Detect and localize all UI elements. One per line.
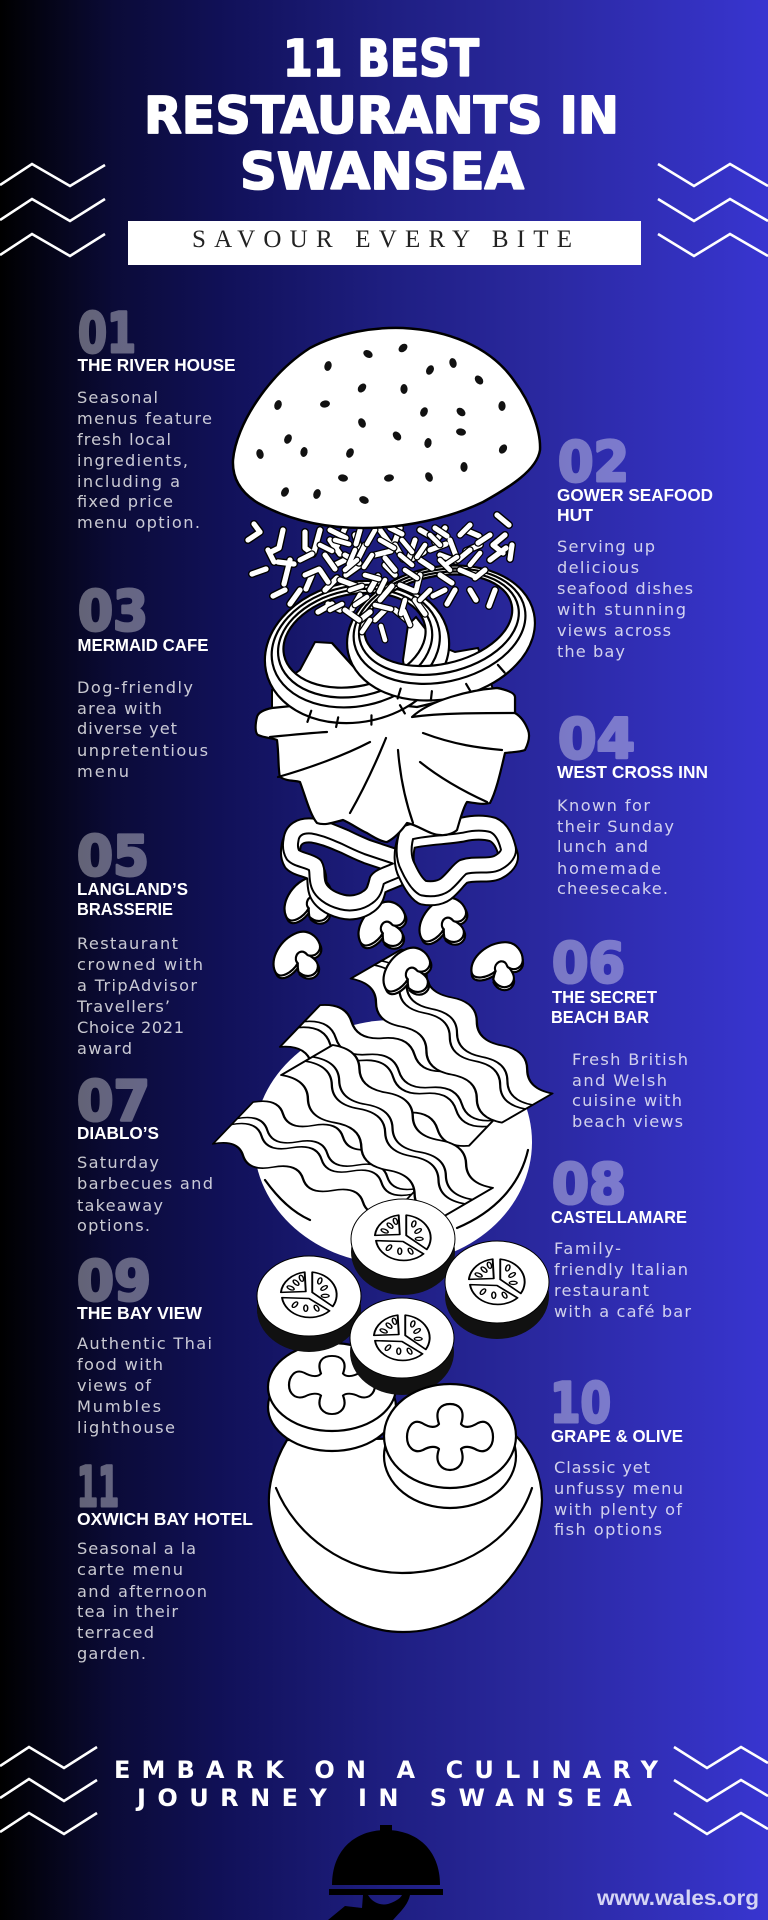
panel: 04 west cross inn: Known for	[557, 796, 650, 815]
panel: 02 gower seafood hut: GOWER SEAFOOD	[557, 485, 713, 505]
panel: 02 gower seafood hut: seafood dishes	[557, 579, 693, 598]
panel: 05 langland's brasserie: BRASSERIE	[77, 899, 173, 919]
panel: 10 grape and olive: fish options	[554, 1520, 662, 1539]
panel: 04 west cross inn: WEST CROSS INN	[557, 762, 708, 782]
panel: 02 gower seafood hut: HUT	[557, 505, 593, 525]
panel: 10 grape and olive: unfussy menu	[554, 1479, 683, 1498]
title: SWANSEA	[240, 143, 525, 202]
panel: 08 castellamare: restaurant	[554, 1281, 649, 1300]
panel: 07 diablo's: 07	[77, 1069, 150, 1133]
cucumber 1	[257, 1256, 361, 1352]
cucumber 2	[351, 1199, 455, 1295]
panel: 07 diablo's: Saturday	[77, 1153, 159, 1172]
panel: 04 west cross inn: homemade	[557, 859, 661, 878]
panel: 08 castellamare: Family-	[554, 1239, 621, 1258]
subtitle banner: SAVOUR EVERY BITE	[192, 226, 572, 253]
panel: 05 langland's brasserie: LANGLAND’S	[77, 879, 188, 899]
icon: waiter hand with cloche	[328, 1825, 443, 1920]
bacon strips	[208, 946, 559, 1222]
panel: 06 the secret beach bar	[551, 931, 688, 1131]
panel: 02 gower seafood hut: 02	[558, 430, 629, 494]
closing message: JOURNEY IN SWANSEA	[135, 1784, 632, 1812]
cucumber slices: back row	[257, 1199, 549, 1352]
panel: 03 mermaid cafe: 03	[78, 579, 148, 643]
panel: 10 grape and olive: with plenty of	[554, 1500, 682, 1519]
panel: 02 gower seafood hut: Serving up	[557, 537, 655, 556]
decorative chevrons: bottom left	[0, 1747, 97, 1834]
panel: 04 west cross inn	[557, 707, 708, 898]
panel: 01 the river house: fixed price	[77, 492, 173, 511]
panel: 09 the bay view	[77, 1249, 212, 1437]
tomato slice: right	[384, 1384, 516, 1508]
title: 11 BEST	[283, 30, 479, 89]
panel: 10 grape and olive: GRAPE & OLIVE	[551, 1426, 683, 1446]
panel: 06 the secret beach bar: cuisine with	[572, 1091, 682, 1110]
panel: 05 langland's brasserie: a TripAdvisor	[77, 976, 197, 995]
panel: 07 diablo's: DIABLO’S	[77, 1123, 159, 1143]
panel: 07 diablo's: options.	[77, 1216, 150, 1235]
panel: 11 oxwich bay hotel: and afternoon	[77, 1582, 207, 1601]
burger illustration	[208, 328, 559, 1632]
onion ring: left	[251, 564, 463, 744]
panel: 11 oxwich bay hotel: Seasonal a la	[77, 1539, 196, 1558]
panel: 07 diablo's: barbecues and	[77, 1174, 213, 1193]
panel: 10 grape and olive: 10	[550, 1371, 611, 1435]
panel: 09 the bay view: 09	[77, 1249, 151, 1313]
panel: 11 oxwich bay hotel: terraced	[77, 1623, 154, 1642]
panel: 01 the river house: fresh local	[77, 430, 171, 449]
pepper rings	[290, 823, 508, 910]
panel: 01 the river house: THE RIVER HOUSE	[78, 355, 236, 375]
panel: 03 mermaid cafe: MERMAID CAFE	[78, 635, 208, 655]
panel: 06 the secret beach bar: and Welsh	[572, 1071, 667, 1090]
panel: 11 oxwich bay hotel: carte menu	[77, 1560, 183, 1579]
panel: 02 gower seafood hut: the bay	[557, 642, 625, 661]
panel: 02 gower seafood hut: with stunning	[557, 600, 686, 619]
panel: 10 grape and olive	[550, 1371, 683, 1539]
cucumber 3	[445, 1241, 549, 1339]
panel: 06 the secret beach bar: beach views	[572, 1112, 683, 1131]
panel: 01 the river house: menu option.	[77, 513, 200, 532]
panel: 05 langland's brasserie: Restaurant	[77, 934, 178, 953]
panel: 11 oxwich bay hotel	[77, 1455, 253, 1663]
subtitle banner	[128, 221, 641, 265]
title	[144, 30, 619, 202]
panel: 09 the bay view: views of	[77, 1376, 151, 1395]
panel: 04 west cross inn: cheesecake.	[557, 879, 668, 898]
panel: 06 the secret beach bar: Fresh British	[572, 1050, 688, 1069]
panel: 08 castellamare: with a café bar	[554, 1302, 691, 1321]
onion ring: right	[334, 549, 548, 717]
panel: 03 mermaid cafe: menu	[77, 762, 129, 781]
panel: 10 grape and olive: Classic yet	[554, 1458, 650, 1477]
panel: 11 oxwich bay hotel: OXWICH BAY HOTEL	[77, 1509, 253, 1529]
panel: 06 the secret beach bar: THE SECRET	[552, 987, 657, 1007]
closing message	[114, 1756, 659, 1812]
panel: 01 the river house: including a	[77, 472, 180, 491]
pepper: right	[404, 823, 508, 896]
panel: 09 the bay view: Authentic Thai	[77, 1334, 212, 1353]
panel: 05 langland's brasserie: award	[77, 1039, 132, 1058]
decorative chevrons: top left	[0, 164, 105, 256]
panel: 01 the river house: ingredients,	[77, 451, 188, 470]
bottom bun	[269, 1437, 542, 1632]
closing message: EMBARK ON A CULINARY	[114, 1756, 659, 1784]
panel: 04 west cross inn: lunch and	[557, 837, 648, 856]
panel: 08 castellamare: friendly Italian	[554, 1260, 688, 1279]
panel: 01 the river house	[77, 301, 236, 532]
panel: 02 gower seafood hut	[557, 430, 713, 661]
decorative chevrons: bottom right	[674, 1747, 768, 1834]
panel: 07 diablo's	[77, 1069, 213, 1235]
website url: www.wales.org	[596, 1887, 759, 1910]
panel: 05 langland's brasserie: crowned with	[77, 955, 203, 974]
onion rings	[251, 549, 548, 744]
title: RESTAURANTS IN	[144, 87, 619, 146]
panel: 03 mermaid cafe: area with	[77, 699, 162, 718]
panel: 05 langland's brasserie: Travellers’	[76, 997, 170, 1016]
panel: 06 the secret beach bar: BEACH BAR	[551, 1007, 649, 1027]
panel: 04 west cross inn: their Sunday	[557, 817, 674, 836]
panel: 02 gower seafood hut: delicious	[557, 558, 639, 577]
panel: 03 mermaid cafe	[77, 579, 208, 781]
panel: 09 the bay view: lighthouse	[77, 1418, 175, 1437]
panel: 09 the bay view: THE BAY VIEW	[77, 1303, 202, 1323]
cucumber 1 front copy	[257, 1256, 361, 1352]
panel: 09 the bay view: Mumbles	[77, 1397, 161, 1416]
panel: 01 the river house: menus feature	[77, 409, 212, 428]
pepper: left	[290, 826, 401, 910]
lettuce flap over ring	[412, 688, 515, 717]
panel: 08 castellamare: 08	[552, 1152, 626, 1216]
panel: 11 oxwich bay hotel: 11	[77, 1455, 119, 1519]
panel: 02 gower seafood hut: views across	[557, 621, 671, 640]
tomato slice: left	[268, 1343, 396, 1451]
bottom layer plate circle	[254, 1020, 532, 1264]
panel: 04 west cross inn: 04	[558, 707, 635, 771]
sesame seeds	[255, 342, 509, 505]
lettuce	[256, 617, 529, 842]
cucumber 4	[350, 1298, 454, 1395]
panel: 05 langland's brasserie: Choice 2021	[77, 1018, 184, 1037]
panel: 05 langland's brasserie	[76, 824, 203, 1058]
shredded cheese	[248, 515, 512, 640]
decorative chevrons: top right	[658, 164, 768, 256]
panel: 01 the river house: 01	[78, 301, 136, 365]
panel: 08 castellamare	[551, 1152, 691, 1321]
panel: 06 the secret beach bar: 06	[552, 931, 625, 995]
panel: 07 diablo's: takeaway	[77, 1196, 163, 1215]
top bun	[233, 328, 540, 528]
panel: 05 langland's brasserie: 05	[77, 824, 149, 888]
panel: 11 oxwich bay hotel: tea in their	[77, 1602, 178, 1621]
panel: 03 mermaid cafe: Dog-friendly	[77, 678, 193, 697]
mushrooms	[264, 871, 525, 1007]
panel: 11 oxwich bay hotel: garden.	[77, 1644, 146, 1663]
panel: 08 castellamare: CASTELLAMARE	[551, 1207, 687, 1227]
panel: 03 mermaid cafe: diverse yet	[77, 719, 177, 738]
panel: 03 mermaid cafe: unpretentious	[77, 741, 208, 760]
panel: 01 the river house: Seasonal	[77, 388, 158, 407]
panel: 09 the bay view: food with	[77, 1355, 163, 1374]
